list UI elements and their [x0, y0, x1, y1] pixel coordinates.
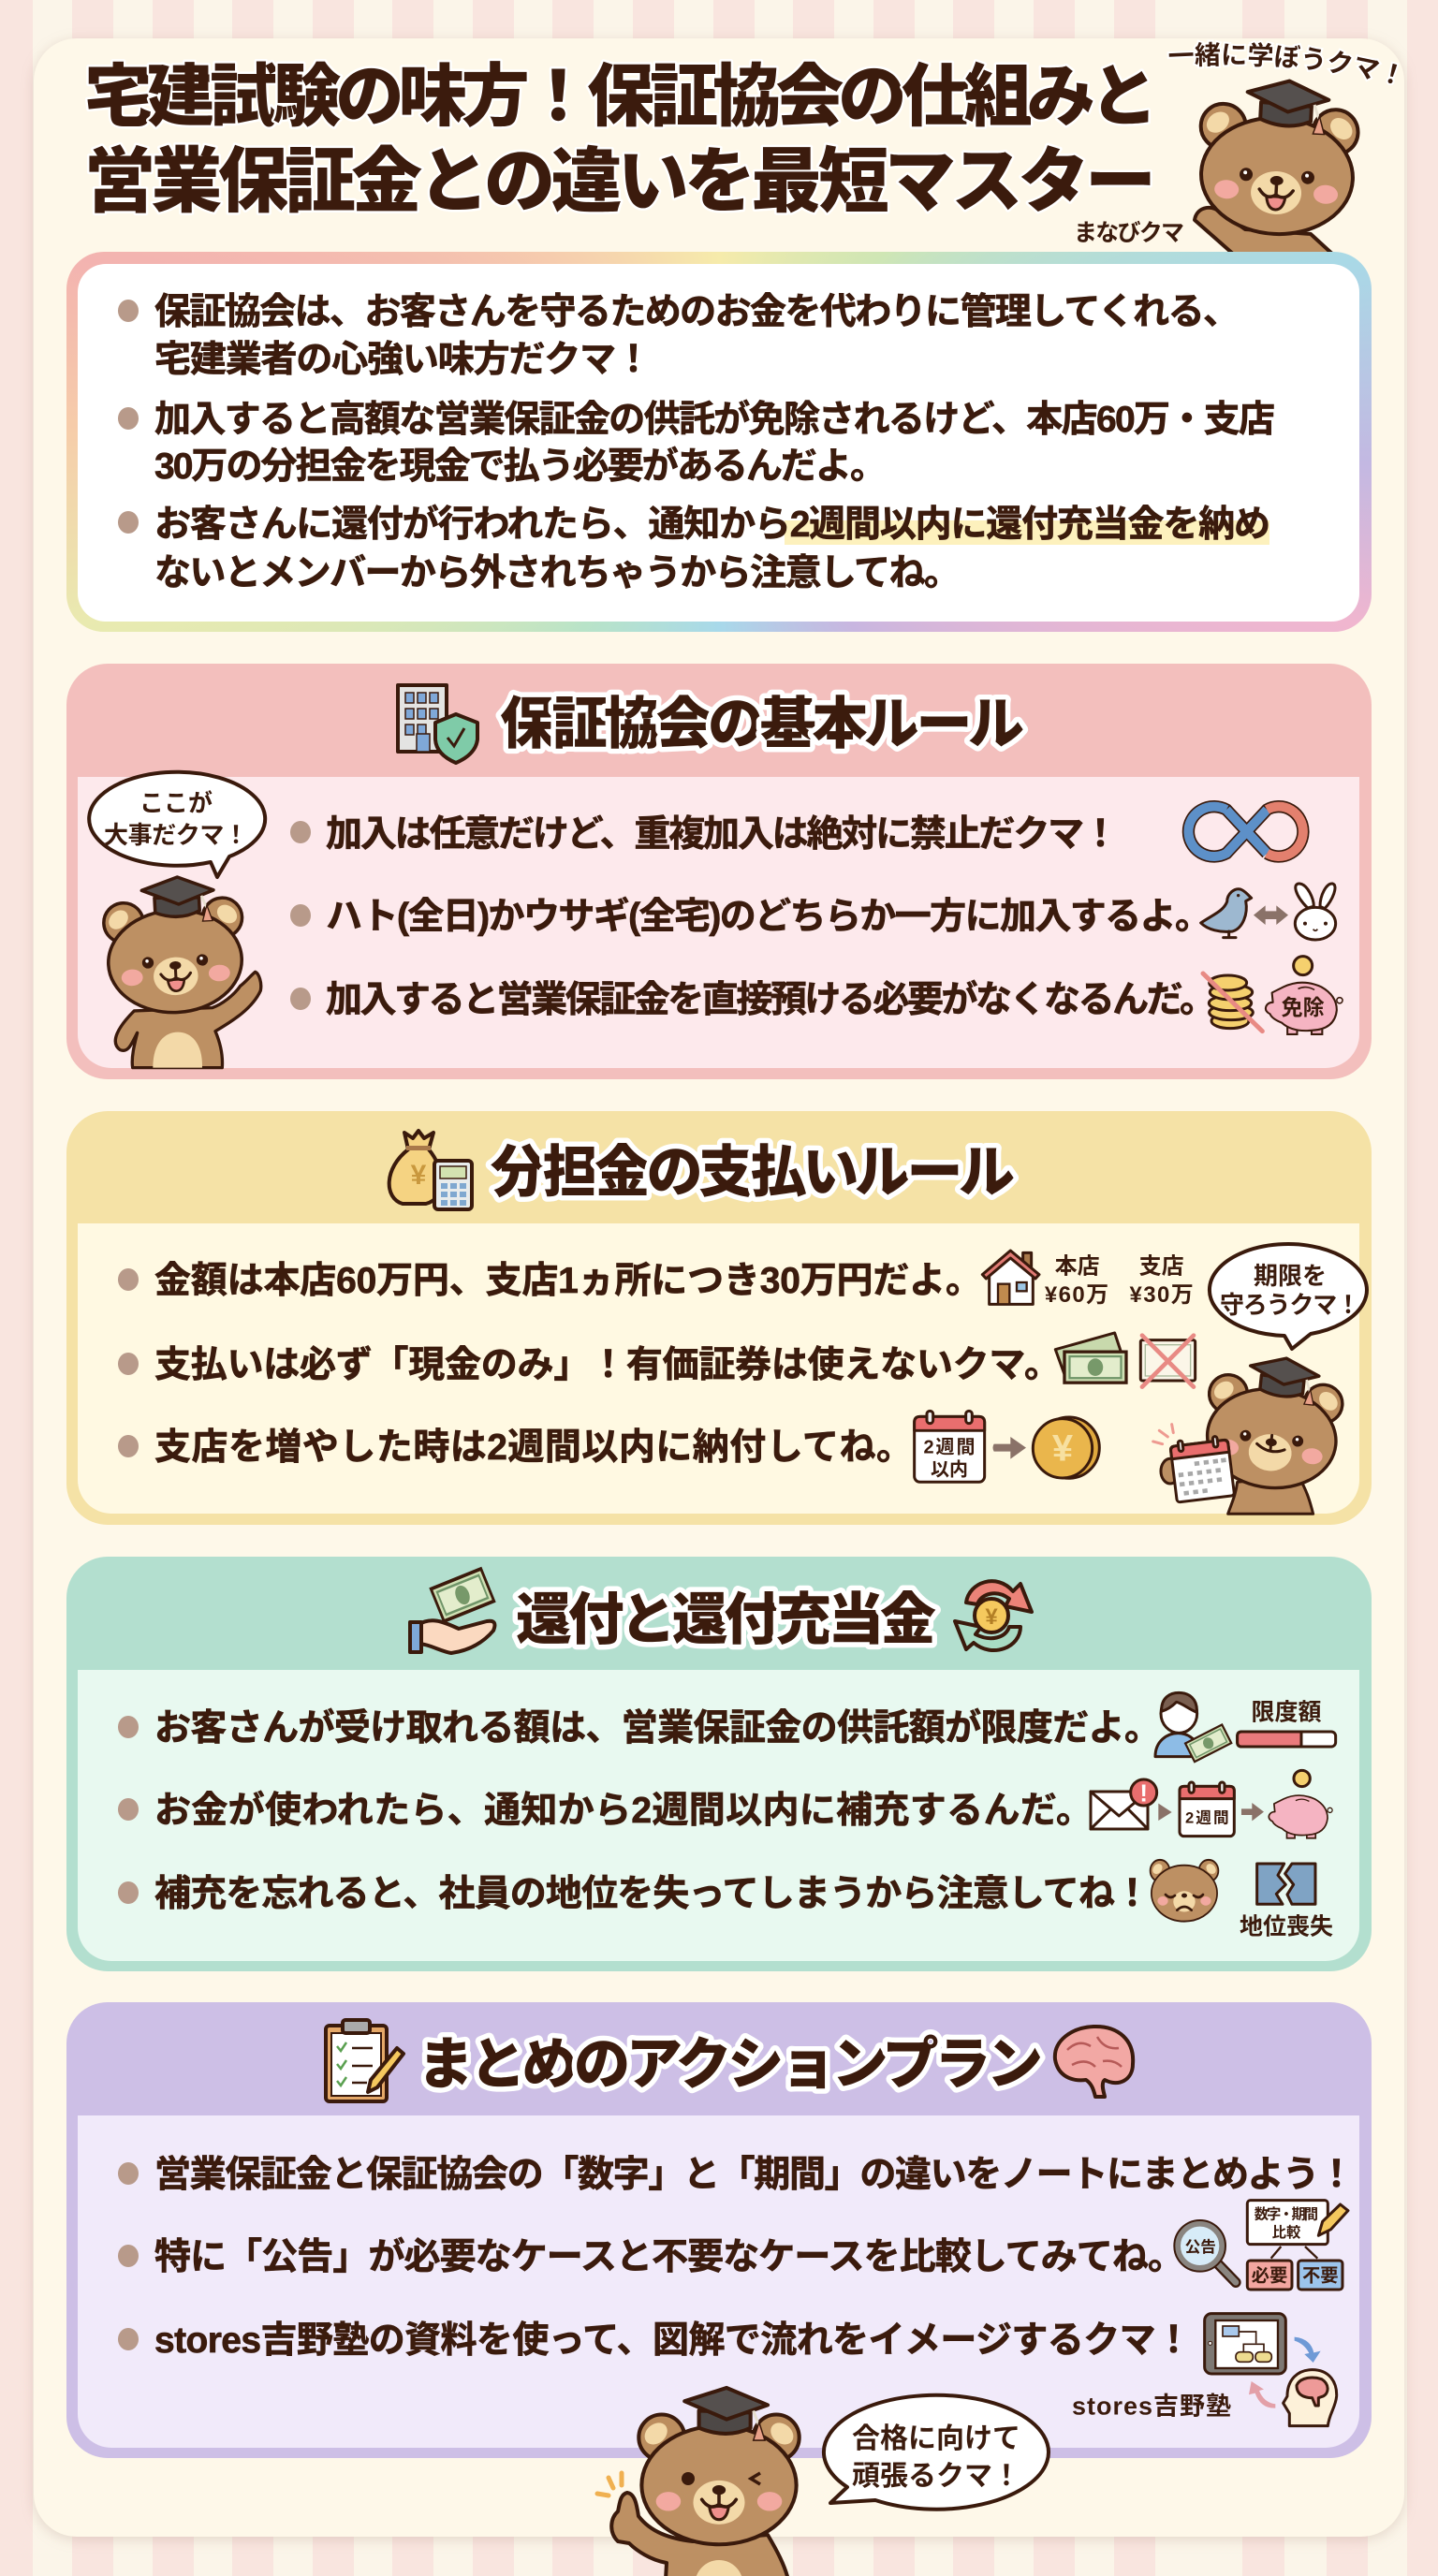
rule text: 金額は本店60万円、支店1ヵ所につき30万円だよ。 — [154, 1261, 982, 1301]
comparison box: 数字・期間 — [1255, 2206, 1318, 2223]
summary text — [154, 292, 1275, 593]
icons in the rule rows — [1091, 1692, 1336, 1940]
icon: yen coin — [1033, 1417, 1099, 1478]
title: 宅建試験の味方！保証協会の仕組みと — [84, 59, 1158, 135]
icon: coin stack crossed out — [1203, 973, 1262, 1032]
speech bubble: 期限を守ろうクマ!: 守ろうクマ！ — [1220, 1291, 1360, 1319]
icon: calendar 2週間以内: 2週間 — [923, 1436, 975, 1457]
rule text: 加入すると営業保証金を直接預ける必要がなくなるんだ。 — [326, 980, 1216, 1020]
icon: securities crossed out — [1140, 1336, 1196, 1387]
action text: 営業保証金と保証協会の「数字」と「期間」の違いをノートにまとめよう！ — [154, 2155, 1355, 2195]
icon: tablet with flowchart — [1205, 2314, 1285, 2374]
caption: まなびクマ: まなびクマ — [1074, 220, 1184, 246]
summary text: 保証協会は、お客さんを守るためのお金を代わりに管理してくれる、 — [154, 292, 1240, 332]
limit gauge: 限度額 — [1238, 1699, 1336, 1747]
rule text — [326, 814, 1216, 1020]
limit gauge: 限度額: 限度額 — [1252, 1699, 1321, 1725]
icon: money bag and calculator — [389, 1131, 472, 1209]
icon: calendar 2週間以内: 以内 — [931, 1459, 968, 1481]
icons in the rule rows — [1188, 807, 1343, 1034]
bullets — [118, 1716, 139, 1904]
rule text: 加入は任意だけど、重複加入は絶対に禁止だクマ！ — [326, 814, 1119, 855]
speech bubble: ここが大事だクマ! — [89, 772, 265, 877]
rule text: お金が使われたら、通知から2週間以内に補充するんだ。 — [154, 1791, 1093, 1831]
icon: envelope alert — [1091, 1779, 1157, 1829]
icon: infinity no double membership — [1188, 807, 1303, 856]
icon: magnifier 公告: 公告 — [1185, 2238, 1216, 2256]
action text: 特に「公告」が必要なケースと不要なケースを比較してみてね。 — [154, 2237, 1184, 2277]
summary text: 宅建業者の心強い味方だクマ！ — [154, 340, 652, 380]
icon: calendar 2週間 — [1180, 1782, 1234, 1837]
box: 不要: 不要 — [1302, 2266, 1339, 2286]
white inner area — [78, 264, 1359, 622]
icon: piggy bank refill — [1269, 1770, 1332, 1838]
mascot: bear with calendar — [1153, 1354, 1344, 1514]
heading: 保証協会の基本ルール — [500, 693, 1024, 755]
speech bubble: 合格に向けて頑張るクマ! — [824, 2395, 1049, 2510]
rule text: 支払いは必ず「現金のみ」！有価証券は使えないクマ。 — [154, 1345, 1061, 1385]
speech bubble: ここが大事だクマ!: 大事だクマ！ — [104, 821, 248, 849]
bullets — [118, 1268, 139, 1457]
branch fee labels: ¥60万 — [1045, 1282, 1108, 1308]
curved caption: 一緒に学ぼうクマ!: 一緒に学ぼうクマ！ — [1167, 39, 1399, 85]
icon: broken status block — [1257, 1864, 1315, 1904]
panel: 保証協会の基本ルール — [66, 664, 1372, 1079]
speech bubble: 合格に向けて頑張るクマ!: 合格に向けて — [852, 2423, 1020, 2454]
speech bubble: 期限を守ろうクマ! — [1210, 1244, 1367, 1349]
icon: envelope alert: ! — [1139, 1779, 1148, 1808]
icon: circulating yen — [955, 1581, 1032, 1650]
panel: summary — [66, 252, 1372, 632]
icon: house — [982, 1251, 1039, 1304]
bullets — [118, 2162, 139, 2350]
arrow: blue — [1295, 2337, 1321, 2363]
speech bubble: 期限を守ろうクマ!: 期限を — [1254, 1262, 1327, 1290]
icons in the rule rows — [915, 1251, 1344, 1514]
heading: まとめのアクションプラン — [418, 2033, 1043, 2096]
icons in the action rows — [1072, 2201, 1348, 2426]
icon: yen coin: ¥ — [1052, 1428, 1074, 1470]
summary text: ないとメンバーから外されちゃうから注意してね。 — [154, 553, 961, 593]
rainbow border — [66, 252, 1372, 632]
icon: rabbit — [1295, 884, 1336, 940]
rule text: ハト(全日)かウサギ(全宅)のどちらか一方に加入するよ。 — [326, 897, 1211, 937]
highlight — [785, 520, 1269, 545]
speech bubble: ここが大事だクマ!: ここが — [139, 789, 213, 817]
icon: customer receiving money — [1155, 1692, 1231, 1762]
label: stores吉野塾: stores吉野塾 — [1072, 2392, 1231, 2420]
arrow — [1241, 1803, 1264, 1821]
icon: magnifier 公告 — [1174, 2220, 1236, 2282]
icon: cash — [1055, 1333, 1126, 1383]
action text: stores吉野塾の資料を使って、図解で流れをイメージするクマ！ — [154, 2320, 1192, 2361]
rule text: 補充を忘れると、社員の地位を失ってしまうから注意してね！ — [154, 1874, 1151, 1914]
mascot: まなびクマ waving — [1195, 79, 1359, 255]
icon: piggy bank with 免除 — [1266, 957, 1343, 1034]
heading: 還付と還付充当金 — [516, 1588, 936, 1651]
icon: building and shield — [398, 685, 477, 763]
icon: calendar 2週間以内 — [915, 1411, 985, 1482]
arrow: pink — [1249, 2381, 1275, 2408]
branch fee labels: ¥30万 — [1129, 1282, 1194, 1308]
panel: 還付と還付充当金 — [66, 1557, 1372, 1971]
icon: sad bear — [1151, 1860, 1218, 1922]
box: 必要: 必要 — [1252, 2265, 1287, 2286]
panel: まとめのアクションプラン — [66, 2002, 1372, 2458]
rule text: 支店を増やした時は2週間以内に納付してね。 — [154, 1427, 913, 1468]
arrow — [1158, 1804, 1172, 1821]
branch fee labels: 支店 — [1139, 1254, 1184, 1280]
rule text — [154, 1708, 1161, 1914]
panel: 分担金の支払いルール — [66, 1111, 1372, 1525]
box: 不要 — [1299, 2261, 1343, 2290]
icon: clipboard — [326, 2020, 404, 2101]
icon: head with brain — [1284, 2370, 1337, 2426]
bullets — [290, 821, 311, 1010]
mascot: pointing bear — [103, 875, 261, 1068]
rule text: お客さんが受け取れる額は、営業保証金の供託額が限度だよ。 — [154, 1708, 1161, 1749]
summary text: 30万の分担金を現金で払う必要があるんだよ。 — [154, 446, 887, 487]
icon: money bag and calculator: ¥ — [411, 1160, 427, 1191]
mascot: thumbs-up bear — [597, 2388, 800, 2576]
arrow — [992, 1437, 1026, 1459]
comparison box — [1247, 2201, 1328, 2259]
action text — [154, 2155, 1355, 2361]
comparison box: 比較 — [1272, 2224, 1301, 2241]
summary bullets — [118, 300, 139, 534]
heading: 分担金の支払いルール — [491, 1141, 1015, 1204]
rule text — [154, 1261, 1061, 1468]
icon: brain — [1055, 2027, 1133, 2097]
icon: calendar 2週間: 2週間 — [1185, 1808, 1229, 1826]
title: 営業保証金との違いを最短マスター — [84, 142, 1156, 222]
summary text: お客さんに還付が行われたら、通知から2週間以内に還付充当金を納め — [154, 505, 1270, 545]
box: 必要 — [1247, 2261, 1292, 2290]
branch fee labels: 本店 — [1055, 1254, 1100, 1280]
icon: circulating yen: ¥ — [985, 1604, 998, 1630]
branch fee labels — [1045, 1254, 1194, 1308]
icon: double arrow — [1254, 905, 1288, 925]
speech bubble: 合格に向けて頑張るクマ!: 頑張るクマ！ — [852, 2461, 1020, 2492]
icon: pigeon — [1201, 889, 1252, 938]
title — [84, 59, 1158, 222]
label: 地位喪失: 地位喪失 — [1240, 1914, 1333, 1940]
icon: hand receiving money — [410, 1569, 494, 1653]
icon: pencil — [1318, 2204, 1348, 2235]
summary text: 加入すると高額な営業保証金の供託が免除されるけど、本店60万・支店 — [154, 400, 1275, 440]
icon: piggy bank with 免除: 免除 — [1282, 995, 1325, 1019]
